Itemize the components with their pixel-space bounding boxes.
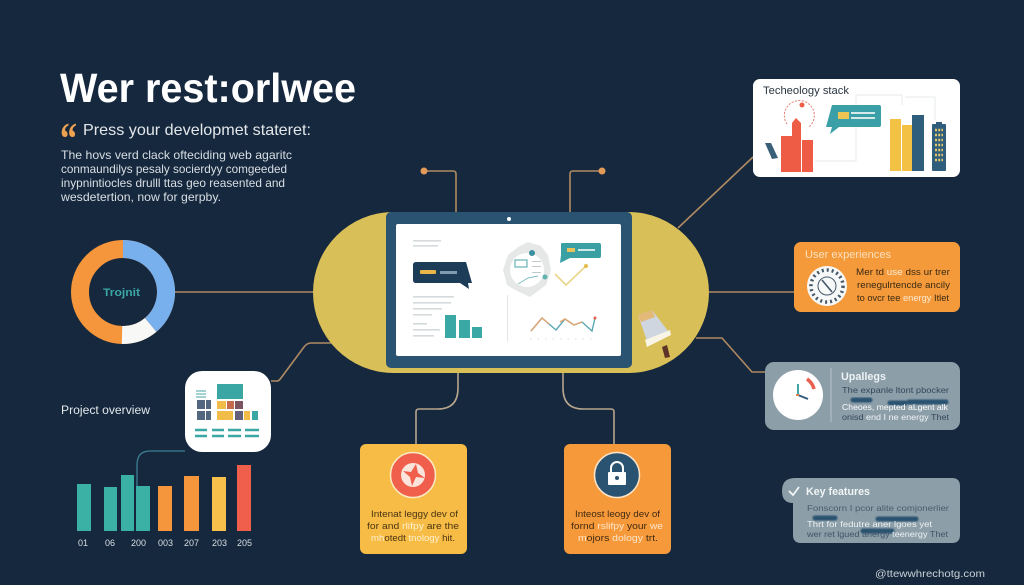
bar labels: 01	[78, 538, 88, 548]
user experiences heading: User experiences	[805, 249, 892, 261]
screen: yellow trend line	[555, 264, 588, 285]
key features heading: Key features	[806, 486, 870, 498]
key features text: Thrt for fedutre aner lgoes yet	[807, 519, 933, 529]
icon: plug	[765, 143, 778, 159]
panel: project overview card	[185, 371, 271, 452]
key features text	[806, 503, 949, 539]
icon: paint brush	[638, 310, 671, 358]
connector: card to bar chart	[137, 451, 185, 486]
yellow card text: mhotedt tnology hit.	[371, 533, 455, 543]
panel: orange feature card	[564, 444, 671, 554]
overview card menu lines	[196, 391, 206, 397]
technology stack heading: Techeology stack	[763, 85, 849, 97]
bar labels: 207	[184, 538, 199, 548]
key features text: wer ret lgued anergy teenergy Thet	[806, 529, 949, 539]
connector lines	[175, 157, 794, 444]
title: Wer rest:orlwee	[60, 65, 356, 111]
upgrades text: onisd end I ne energy Thet	[842, 412, 950, 422]
orange card text: mojors dology trt.	[578, 533, 658, 543]
upgrades heading: Upallegs	[841, 371, 886, 383]
teal speech bubble	[826, 105, 881, 134]
user experiences text: to ovcr tee energy Itlet	[857, 293, 950, 303]
panel: user experiences	[794, 242, 960, 312]
panel: key features	[782, 478, 960, 543]
bar labels: 003	[158, 538, 173, 548]
project overview heading: Project overview	[61, 405, 151, 417]
intro paragraph: wesdetertion, now for gerpby.	[60, 190, 221, 204]
bar labels: 200	[131, 538, 146, 548]
yellow card text	[367, 509, 459, 543]
screen: gear badge	[503, 242, 551, 297]
orange card text	[571, 509, 663, 543]
icon: dial	[807, 266, 847, 306]
overview card table rows	[195, 430, 259, 436]
panel: upgrades	[765, 362, 960, 430]
website credit: @ttewwhrechotg.com	[875, 568, 985, 580]
intro paragraph: The hovs verd clack ofteciding web agaritc	[61, 148, 292, 162]
screen: text lines	[413, 240, 454, 337]
icon: clock	[773, 370, 823, 420]
upgrades text	[842, 385, 950, 422]
upgrades text: Cheoes, mepted aLgent alk	[842, 402, 949, 412]
connector end dots	[420, 168, 606, 174]
panel divider	[830, 368, 832, 422]
screen: line chart	[530, 316, 596, 339]
central capsule	[313, 212, 709, 373]
orange card text: fornd rslifpy your we	[571, 521, 663, 531]
bar labels	[78, 538, 252, 548]
book bars	[890, 115, 946, 171]
donut chart	[80, 249, 166, 335]
icon: globe badge	[390, 452, 436, 498]
bar labels: 205	[237, 538, 252, 548]
faint connectors	[815, 95, 935, 161]
screen: dark speech bubble	[413, 262, 472, 289]
screen: teal bars	[445, 315, 482, 338]
icon: red towers	[781, 102, 813, 172]
intro paragraph: conmaundilys pesaly socierdyy comgeeded	[61, 162, 287, 176]
overview card grid	[197, 384, 258, 420]
tablet screen	[396, 224, 621, 356]
donut label: Trojnit	[103, 287, 140, 299]
user experiences text: renegulrtencde ancily	[857, 280, 951, 290]
bar labels: 203	[212, 538, 227, 548]
icon: dashed ring	[784, 101, 814, 127]
icon: check mark	[789, 487, 799, 495]
intro paragraph	[60, 148, 292, 204]
user experiences text	[856, 267, 951, 303]
panel: technology stack	[753, 79, 960, 177]
user experiences text: Mer td use dss ur trer	[856, 267, 950, 277]
screen: divider	[507, 295, 508, 342]
yellow card text: Intenat leggy dev of	[371, 509, 459, 519]
panel: yellow feature card	[360, 444, 467, 554]
intro paragraph: inypnintiocles drulll ttas geo reasented and	[61, 176, 285, 190]
orange card text: Inteost leogy dev of	[575, 509, 661, 519]
upgrades text: The expanle ltont pbocker	[842, 385, 949, 395]
bar labels: 06	[105, 538, 115, 548]
screen: teal speech bubble	[560, 243, 601, 263]
key features text: Fonscorn I pcor alite comjonerlier	[807, 503, 949, 513]
icon: quote marks: “	[60, 114, 77, 163]
subtitle: Press your developmet stateret:	[83, 122, 311, 139]
tablet	[386, 212, 632, 368]
bar chart	[77, 465, 252, 548]
yellow card text: for and rlifpy are the	[367, 521, 459, 531]
icon: lock badge	[594, 452, 640, 498]
